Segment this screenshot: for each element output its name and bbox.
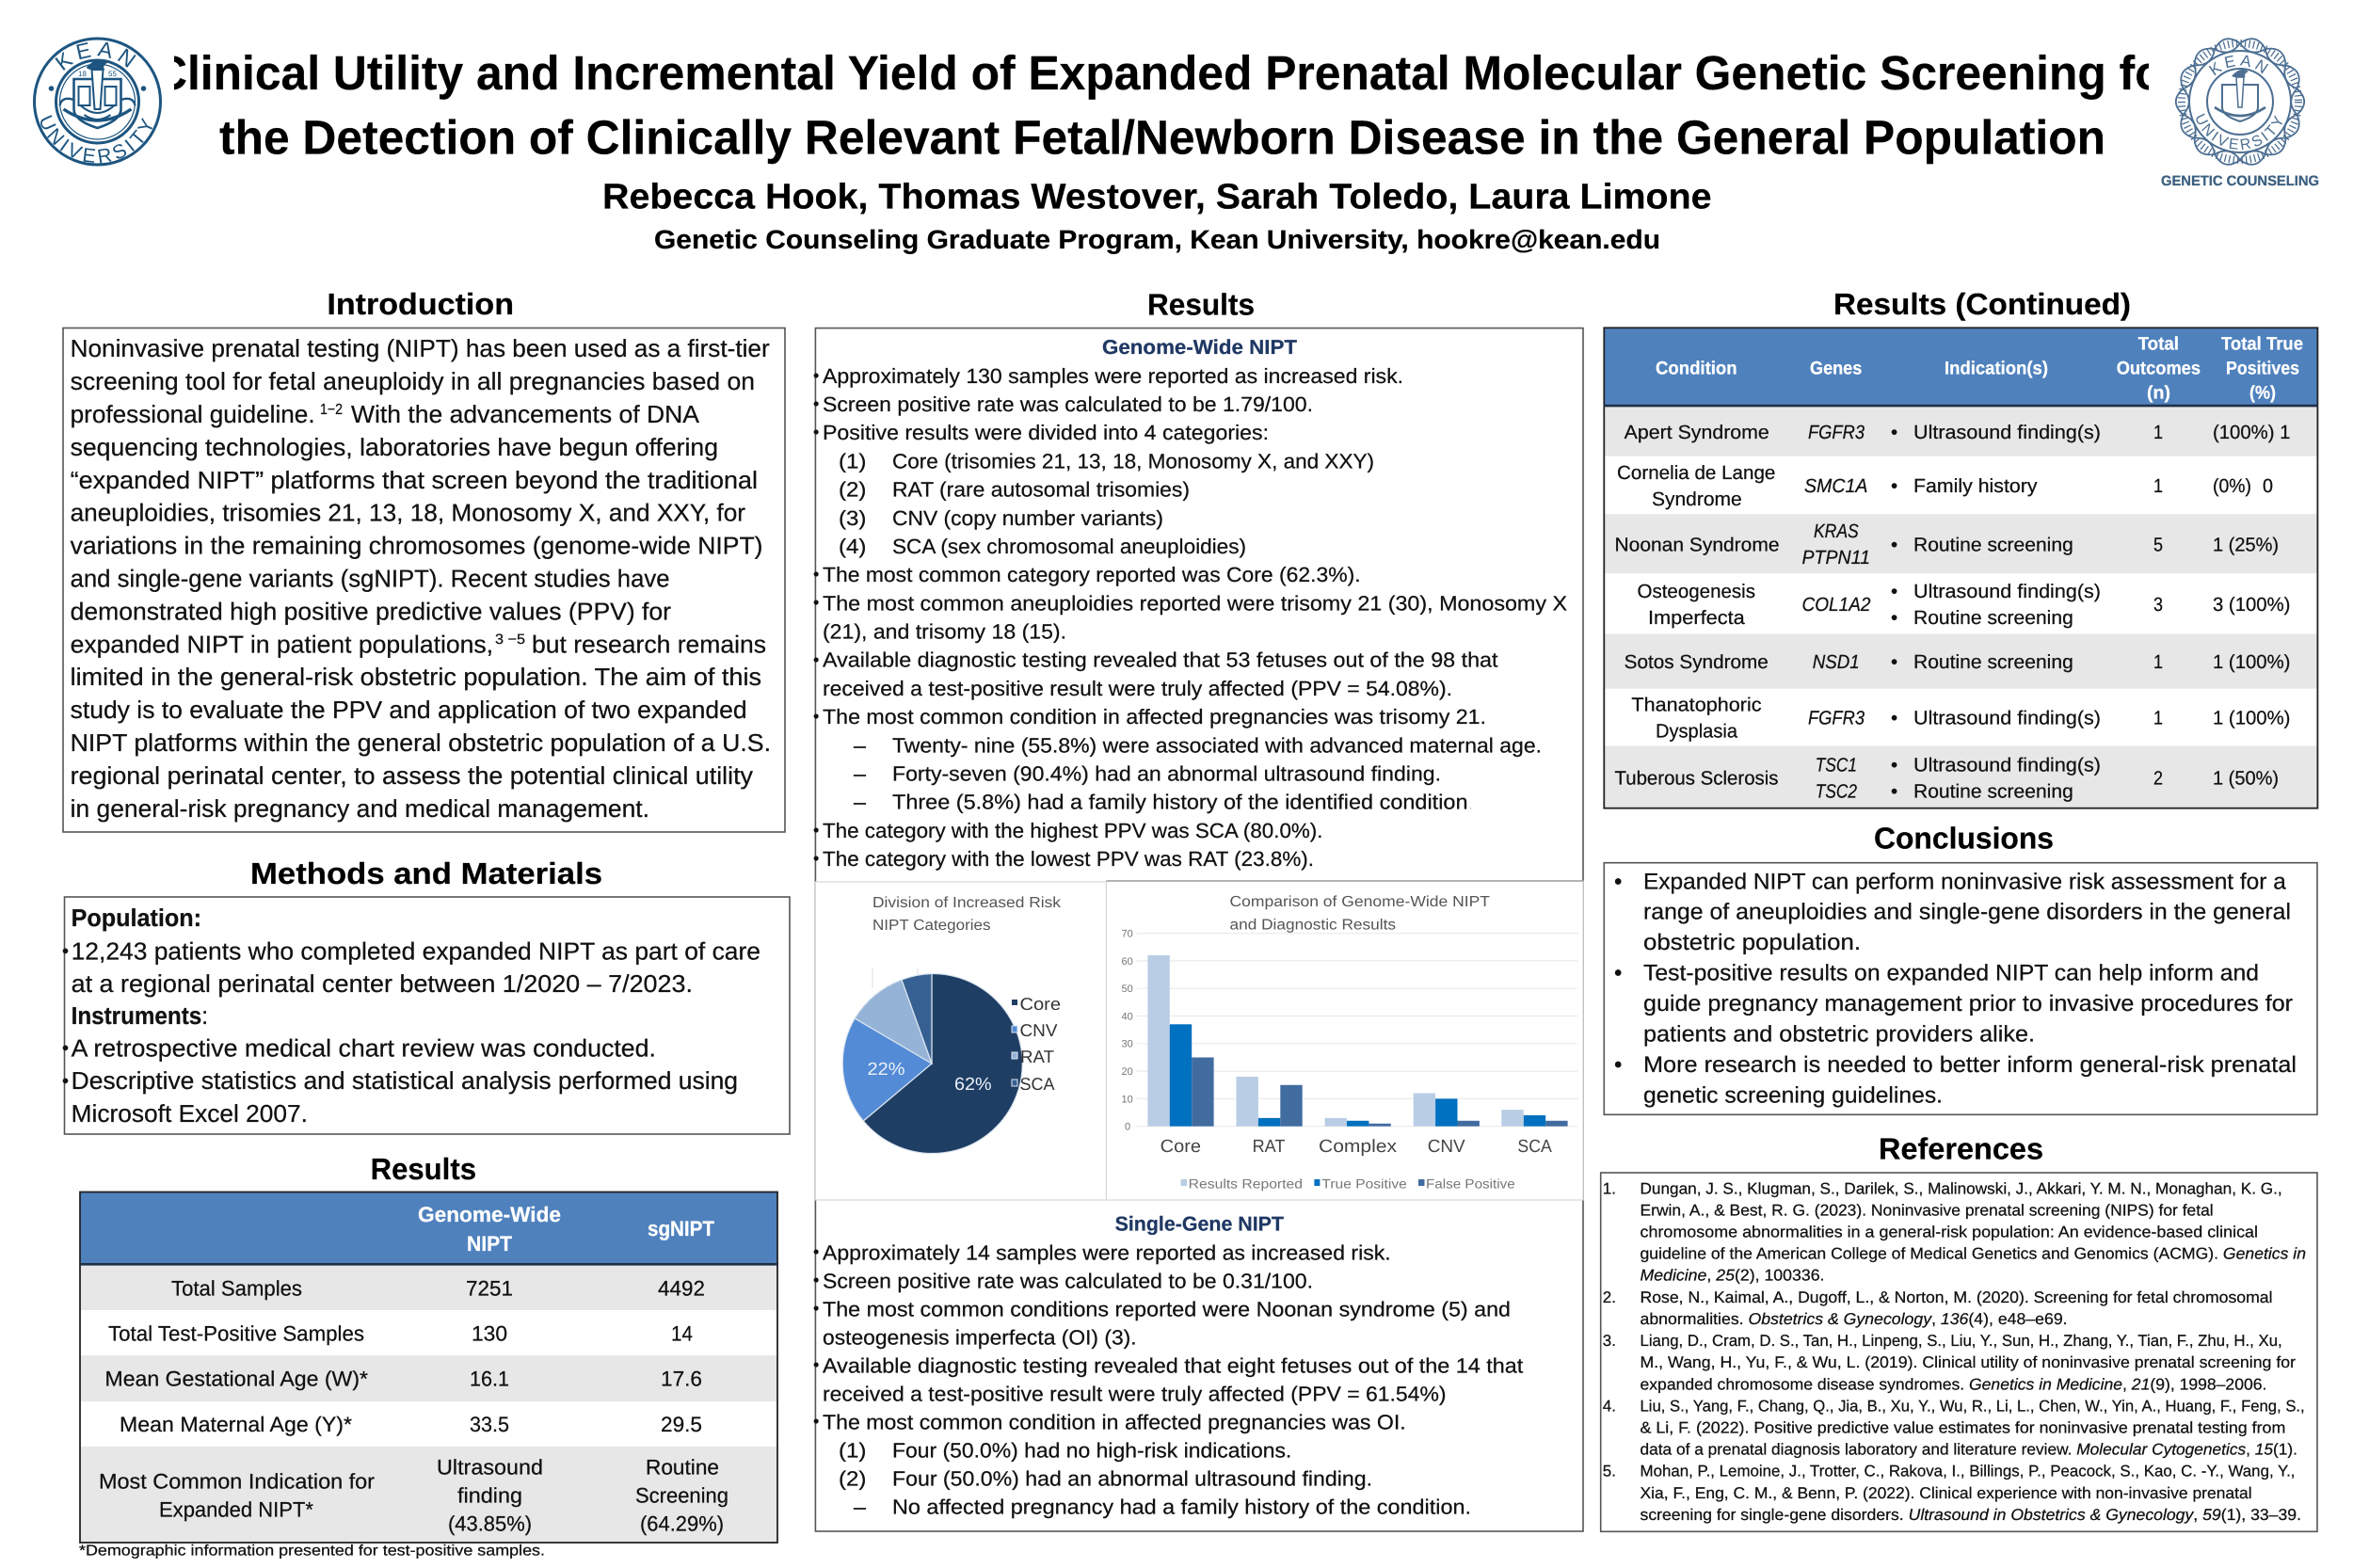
table: single-gene conditions: Sotos Syndrome bbox=[1625, 651, 1769, 673]
table: demographic results: Ultrasound bbox=[437, 1456, 543, 1480]
footnote: *Demographic information presented for test-positive samples. bbox=[79, 1544, 545, 1560]
subheading: Single-Gene NIPT: Single-Gene NIPT bbox=[1115, 1212, 1284, 1235]
chart: pie of increased risk categories: 62% bbox=[954, 1075, 992, 1095]
panel: introduction: demonstrated high positive predictive values (PPV) for bbox=[71, 597, 671, 625]
panel: references: 4. bbox=[1603, 1397, 1616, 1415]
panel: introduction: professional guideline. bbox=[71, 400, 315, 428]
chart: pie of increased risk categories: SCA bbox=[1020, 1074, 1055, 1094]
table: single-gene conditions: Condition bbox=[1656, 358, 1737, 378]
table: single-gene conditions: Positives bbox=[2226, 358, 2299, 378]
chart: pie of increased risk categories: 22% bbox=[868, 1060, 905, 1080]
text block: genome-wide findings: (21), and trisomy 18 (15). bbox=[823, 619, 1066, 644]
panel: references: Liang, D., Cram, D. S., Tan, H., Linpeng, S., Liu, Y., Sun, H., Zhang, Y., Tian, F., Zhu, H., Xu, bbox=[1640, 1332, 2282, 1350]
logo: Kean Genetic Counseling seal: GENETIC COUNSELING bbox=[2161, 173, 2319, 189]
panel: references: Medicine, 25(2), 100336. bbox=[1640, 1267, 1824, 1285]
panel: conclusions: genetic screening guidelines. bbox=[1643, 1083, 1943, 1109]
text block: genome-wide findings: • bbox=[813, 593, 819, 612]
table: single-gene conditions: 1 (25%) bbox=[2213, 534, 2279, 555]
text block: genome-wide findings: Core (trisomies 21, 13, 18, Monosomy X, and XXY) bbox=[892, 449, 1374, 472]
table: demographic results: 17.6 bbox=[661, 1368, 702, 1391]
chart: bar comparison of NIPT and diagnostic results: 70 bbox=[1122, 928, 1133, 939]
table: single-gene conditions: (100%) 1 bbox=[2213, 422, 2290, 443]
panel: conclusions: • bbox=[1614, 1052, 1622, 1078]
heading: Results (Continued): Results (Continued) bbox=[1833, 287, 2131, 321]
table: single-gene conditions: • bbox=[1891, 534, 1897, 555]
chart: bar comparison of NIPT and diagnostic results: CNV bbox=[1428, 1137, 1465, 1157]
chart: bar comparison of NIPT and diagnostic results: Comparison of Genome-Wide NIPT bbox=[1229, 894, 1490, 910]
table: single-gene conditions: Syndrome bbox=[1652, 488, 1742, 510]
table: single-gene conditions: Noonan Syndrome bbox=[1615, 534, 1779, 555]
text block: single-gene findings: Screen positive rate was calculated to be 0.31/100. bbox=[823, 1269, 1313, 1292]
chart: pie of increased risk categories: Division of Increased Risk bbox=[872, 895, 1062, 911]
text block: genome-wide findings: Twenty- nine (55.8%) were associated with advanced maternal age. bbox=[892, 733, 1542, 757]
text block: genome-wide findings: received a test-positive result were truly affected (PPV = 54.08%). bbox=[823, 677, 1452, 700]
table: single-gene conditions: SMC1A bbox=[1804, 475, 1867, 497]
text block: genome-wide findings: SCA (sex chromosomal aneuploidies) bbox=[892, 535, 1246, 558]
table: demographic results: 130 bbox=[472, 1322, 507, 1346]
table: single-gene conditions: 0 bbox=[2263, 475, 2273, 497]
logo: Kean University seal: KEAN bbox=[55, 41, 136, 71]
table: demographic results: 29.5 bbox=[661, 1413, 702, 1436]
text block: genome-wide findings: • bbox=[813, 707, 819, 726]
chart: pie of increased risk categories: NIPT Categories bbox=[872, 918, 990, 934]
table: demographic results: Total Test-Positive Samples bbox=[108, 1322, 364, 1346]
table: single-gene conditions: Outcomes bbox=[2117, 358, 2201, 378]
chart: bar comparison of NIPT and diagnostic results: 40 bbox=[1122, 1011, 1133, 1022]
title bbox=[153, 46, 2182, 164]
table: single-gene conditions: Ultrasound finding(s) bbox=[1913, 707, 2101, 728]
panel: references: Xia, F., Eng, C. M., & Benn, P. (2022). Clinical experience with non-invasive prenatal bbox=[1640, 1484, 2252, 1502]
panel: conclusions: obstetric population. bbox=[1643, 930, 1861, 955]
table: single-gene conditions: FGFR3 bbox=[1808, 422, 1865, 443]
heading: Results (left column): Results bbox=[371, 1152, 476, 1186]
panel: references: 1. bbox=[1603, 1179, 1616, 1197]
text block: genome-wide findings: – bbox=[854, 733, 867, 757]
text block: genome-wide findings: CNV (copy number variants) bbox=[892, 506, 1163, 530]
table: demographic results: Most Common Indication for bbox=[99, 1470, 376, 1494]
table: single-gene conditions: TSC2 bbox=[1816, 780, 1858, 802]
table: demographic results: 33.5 bbox=[470, 1413, 509, 1436]
panel: conclusions: • bbox=[1614, 869, 1622, 894]
panel: references: 2. bbox=[1603, 1288, 1616, 1306]
panel: methods and materials: at a regional perinatal center between 1/2020 – 7/2023. bbox=[72, 969, 693, 998]
table: single-gene conditions: FGFR3 bbox=[1808, 707, 1865, 728]
table: demographic results: NIPT bbox=[467, 1232, 512, 1256]
table: single-gene conditions: • bbox=[1891, 607, 1897, 629]
title: the Detection of Clinically Relevant Fetal/Newborn Disease in the General Population bbox=[219, 110, 2105, 164]
panel: introduction: and single-gene variants (sgNIPT). Recent studies have bbox=[71, 565, 670, 593]
panel: methods and materials: Population: bbox=[72, 904, 201, 932]
panel: references: Rose, N., Kaimal, A., Dugoff, L., & Norton, M. (2020). Screening for fetal chromosomal bbox=[1640, 1288, 2272, 1306]
text block: genome-wide findings: (4) bbox=[839, 535, 866, 558]
panel: introduction: in general-risk pregnancy and medical management. bbox=[71, 794, 649, 823]
table: single-gene conditions: (0%) bbox=[2213, 475, 2251, 497]
logo: Kean Genetic Counseling seal: KEAN bbox=[2208, 55, 2268, 75]
text block: genome-wide findings: Positive results were divided into 4 categories: bbox=[823, 421, 1269, 444]
text block: single-gene findings: – bbox=[854, 1496, 867, 1519]
table: single-gene conditions: • bbox=[1891, 707, 1897, 728]
table: demographic results: 14 bbox=[671, 1322, 693, 1346]
text block: genome-wide findings: Screen positive rate was calculated to be 1.79/100. bbox=[823, 392, 1313, 416]
table: single-gene conditions: Ultrasound finding(s) bbox=[1913, 755, 2101, 776]
text block: single-gene findings: (2) bbox=[839, 1467, 866, 1491]
logo: Kean University seal: UNIVERSITY bbox=[40, 115, 152, 164]
panel: references: Erwin, A., & Best, R. G. (2023). Noninvasive prenatal screening (NIPS) for fetal bbox=[1640, 1201, 2214, 1219]
panel: conclusions: Test-positive results on expanded NIPT can help inform and bbox=[1643, 961, 2259, 986]
text block: genome-wide findings: • bbox=[813, 821, 819, 840]
text block: single-gene findings: The most common condition in affected pregnancies was OI. bbox=[823, 1411, 1406, 1434]
chart: bar comparison of NIPT and diagnostic results: False Positive bbox=[1426, 1176, 1515, 1192]
table: single-gene conditions: Apert Syndrome bbox=[1625, 422, 1769, 443]
table: single-gene conditions: NSD1 bbox=[1813, 651, 1860, 673]
chart: bar comparison of NIPT and diagnostic results: and Diagnostic Results bbox=[1229, 918, 1396, 934]
table: single-gene conditions: Routine screening bbox=[1913, 780, 2073, 802]
table: single-gene conditions: Tuberous Sclerosis bbox=[1615, 768, 1779, 789]
text block: genome-wide findings: The category with the lowest PPV was RAT (23.8%). bbox=[823, 847, 1314, 871]
panel: references bbox=[1601, 1173, 2317, 1531]
authors: Rebecca Hook, Thomas Westover, Sarah Toledo, Laura Limone bbox=[602, 178, 1712, 217]
heading: Results (middle column): Results bbox=[1147, 287, 1255, 321]
panel: introduction: screening tool for fetal aneuploidy in all pregnancies based on bbox=[71, 367, 755, 395]
table: single-gene conditions: • bbox=[1891, 755, 1897, 776]
table: single-gene conditions: 1 bbox=[2153, 651, 2163, 673]
text block: genome-wide findings: – bbox=[854, 791, 867, 814]
panel: introduction: “expanded NIPT” platforms that screen beyond the traditional bbox=[71, 466, 758, 494]
text block: genome-wide findings: The most common condition in affected pregnancies was trisomy 21. bbox=[823, 705, 1486, 728]
chart: bar comparison of NIPT and diagnostic results: 50 bbox=[1122, 984, 1133, 995]
table: single-gene conditions: Cornelia de Lange bbox=[1617, 462, 1775, 484]
panel: conclusions: guide pregnancy management prior to invasive procedures for bbox=[1643, 991, 2293, 1016]
text block: genome-wide findings: . bbox=[1469, 801, 1472, 812]
table: demographic results: sgNIPT bbox=[648, 1217, 714, 1240]
text block: genome-wide findings: The most common category reported was Core (62.3%). bbox=[823, 563, 1361, 586]
table: single-gene conditions: Ultrasound finding(s) bbox=[1913, 581, 2101, 602]
table: single-gene conditions bbox=[1604, 328, 2318, 808]
panel: references: data of a prenatal diagnosis laboratory and literature review. Molecular Cytogenetics, 15(1). bbox=[1640, 1441, 2297, 1459]
table: demographic results: 4492 bbox=[658, 1276, 705, 1301]
text block: single-gene findings: No affected pregnancy had a family history of the condition. bbox=[892, 1496, 1471, 1519]
panel: references: Dungan, J. S., Klugman, S., Darilek, S., Malinowski, J., Akkari, Y. M. N., Monaghan, K. G., bbox=[1640, 1179, 2282, 1197]
panel: introduction: With the advancements of DNA bbox=[351, 400, 700, 428]
text block: genome-wide findings: – bbox=[854, 762, 867, 785]
chart: bar comparison of NIPT and diagnostic results: Core bbox=[1160, 1137, 1201, 1157]
table: single-gene conditions: 1 bbox=[2153, 707, 2163, 728]
table: single-gene conditions: COL1A2 bbox=[1801, 594, 1871, 616]
text block: genome-wide findings: • bbox=[813, 366, 819, 385]
text block: single-gene findings: • bbox=[813, 1271, 819, 1289]
table: single-gene conditions: • bbox=[1891, 651, 1897, 673]
panel: references: expanded chromosome disease syndromes. Genetics in Medicine , 21(9), 1998–2006. bbox=[1640, 1375, 2266, 1393]
chart: bar comparison of NIPT and diagnostic results: True Positive bbox=[1321, 1176, 1407, 1192]
panel: references: 5. bbox=[1603, 1463, 1616, 1480]
panel: methods and materials bbox=[62, 897, 790, 1134]
table: single-gene conditions: 1 bbox=[2153, 422, 2163, 443]
panel: references: Mohan, P., Lemoine, J., Trotter, C., Rakova, I., Billings, P., Peacock, S., Kao, C. -Y., Wang, Y., bbox=[1640, 1463, 2295, 1480]
table: single-gene conditions: (n) bbox=[2147, 382, 2170, 403]
panel: results middle column bbox=[813, 328, 1583, 1531]
chart: bar comparison of NIPT and diagnostic results: 60 bbox=[1122, 956, 1133, 968]
table: single-gene conditions: 1 (100%) bbox=[2213, 707, 2290, 728]
table: single-gene conditions: 3 bbox=[2153, 594, 2163, 616]
panel: introduction: expanded NIPT in patient populations, bbox=[71, 630, 493, 658]
chart: bar comparison of NIPT and diagnostic results: Complex bbox=[1319, 1137, 1398, 1157]
logo: Kean University seal: 18 bbox=[78, 70, 87, 78]
table: single-gene conditions: • bbox=[1891, 475, 1897, 497]
panel: introduction bbox=[63, 328, 785, 832]
text block: single-gene findings: (1) bbox=[839, 1439, 866, 1463]
table: single-gene conditions: Ultrasound finding(s) bbox=[1913, 422, 2101, 443]
text block: single-gene findings: • bbox=[813, 1412, 819, 1431]
panel: references: & Li, F. (2022). Positive predictive value estimates for noninvasive prenatal testing from bbox=[1640, 1419, 2285, 1436]
text block: genome-wide findings: (3) bbox=[839, 506, 866, 530]
logo: Kean Genetic Counseling seal bbox=[2161, 38, 2319, 189]
chart: pie of increased risk categories: Core bbox=[1020, 994, 1061, 1014]
heading: References: References bbox=[1879, 1132, 2043, 1166]
table: single-gene conditions: 2 bbox=[2153, 768, 2163, 789]
subheading: Genome-Wide NIPT: Genome-Wide NIPT bbox=[1102, 336, 1297, 359]
text block: genome-wide findings: (1) bbox=[839, 449, 866, 472]
panel: introduction: aneuploidies, trisomies 21, 13, 18, Monosomy X, and XXY, for bbox=[71, 499, 745, 527]
panel: methods and materials: Instruments: bbox=[72, 1001, 208, 1030]
table: single-gene conditions: PTPN11 bbox=[1801, 547, 1870, 568]
chart: pie of increased risk categories: RAT bbox=[1020, 1047, 1054, 1066]
text block: genome-wide findings: • bbox=[813, 423, 819, 441]
table: demographic results: Mean Gestational Age (W)* bbox=[105, 1368, 368, 1391]
chart: bar comparison of NIPT and diagnostic results bbox=[1107, 881, 1583, 1200]
table: single-gene conditions: 5 bbox=[2153, 534, 2163, 555]
table: demographic results: Genome-Wide bbox=[418, 1203, 561, 1226]
panel: references: chromosome abnormalities in a general-risk population: An evidence-based clinical bbox=[1640, 1224, 2258, 1240]
table: demographic results: finding bbox=[457, 1484, 522, 1508]
chart: pie of increased risk categories bbox=[815, 882, 1106, 1200]
chart: bar comparison of NIPT and diagnostic results: RAT bbox=[1253, 1137, 1286, 1157]
chart: pie of increased risk categories: CNV bbox=[1020, 1020, 1058, 1040]
table: single-gene conditions: Genes bbox=[1810, 358, 1862, 378]
text block: genome-wide findings bbox=[813, 364, 1567, 871]
table: single-gene conditions: 1 bbox=[2153, 475, 2163, 497]
panel: introduction: 1−2 bbox=[320, 402, 343, 418]
table: single-gene conditions: • bbox=[1891, 581, 1897, 602]
text block: single-gene findings: osteogenesis imperfecta (OI) (3). bbox=[823, 1325, 1137, 1349]
logo: Kean University seal: 55 bbox=[108, 70, 117, 78]
chart: bar comparison of NIPT and diagnostic results: 20 bbox=[1122, 1066, 1133, 1078]
table: single-gene conditions: KRAS bbox=[1814, 520, 1859, 542]
panel: methods and materials: A retrospective medical chart review was conducted. bbox=[72, 1034, 656, 1063]
panel: introduction: Noninvasive prenatal testing (NIPT) has been used as a first-tier bbox=[71, 334, 770, 362]
panel: references: 3. bbox=[1603, 1332, 1616, 1350]
text block: single-gene findings: Four (50.0%) had no high-risk indications. bbox=[892, 1439, 1291, 1463]
panel: conclusions: range of aneuploidies and single-gene disorders in the general bbox=[1643, 900, 2291, 925]
table: single-gene conditions: Family history bbox=[1913, 475, 2038, 497]
table: demographic results bbox=[79, 1192, 778, 1543]
panel: references: M., Wang, H., Yu, F., & Wu, L. (2019). Clinical utility of noninvasive prenatal screening for bbox=[1640, 1353, 2296, 1371]
table: single-gene conditions: 3 (100%) bbox=[2213, 594, 2290, 616]
table: demographic results: 16.1 bbox=[470, 1368, 509, 1391]
text block: genome-wide findings: (2) bbox=[839, 478, 866, 502]
text block: genome-wide findings: • bbox=[813, 650, 819, 669]
panel: conclusions bbox=[1604, 863, 2317, 1114]
panel: introduction: but research remains bbox=[532, 630, 766, 658]
table: demographic results: (43.85%) bbox=[448, 1512, 532, 1536]
table: single-gene conditions: • bbox=[1891, 780, 1897, 802]
table: single-gene conditions: Routine screening bbox=[1913, 651, 2073, 673]
text block: genome-wide findings: • bbox=[813, 394, 819, 413]
text block: genome-wide findings: Approximately 130 samples were reported as increased risk. bbox=[823, 364, 1403, 388]
panel: introduction: regional perinatal center, to assess the potential clinical utility bbox=[71, 761, 753, 790]
panel: introduction: 3 −5 bbox=[495, 632, 525, 648]
table: single-gene conditions: (%) bbox=[2249, 382, 2276, 403]
panel: methods and materials: Microsoft Excel 2007. bbox=[72, 1099, 308, 1128]
table: single-gene conditions: Routine screening bbox=[1913, 607, 2073, 629]
logo: Kean Genetic Counseling seal: UNIVERSITY bbox=[2196, 113, 2282, 150]
table: single-gene conditions: Imperfecta bbox=[1648, 607, 1745, 629]
panel: references: abnormalities. Obstetrics & Gynecology , 136(4), e48–e69. bbox=[1640, 1310, 2068, 1328]
panel: references: Liu, S., Yang, F., Chang, Q., Jia, B., Xu, Y., Wu, R., Li, L., Chen, W., Yin, A., Huang, F., Feng, S., bbox=[1640, 1397, 2305, 1415]
text block: genome-wide findings: Available diagnostic testing revealed that 53 fetuses out of the 98 that bbox=[823, 648, 1498, 672]
text block: single-gene findings: • bbox=[813, 1299, 819, 1318]
title: Clinical Utility and Incremental Yield of Expanded Prenatal Molecular Genetic Screening for bbox=[153, 46, 2182, 100]
panel: methods and materials: • bbox=[62, 1038, 69, 1059]
text block: single-gene findings: • bbox=[813, 1355, 819, 1374]
table: single-gene conditions: Thanatophoric bbox=[1631, 695, 1762, 716]
text block: genome-wide findings: • bbox=[813, 565, 819, 584]
text block: single-gene findings: • bbox=[813, 1242, 819, 1261]
heading: Conclusions: Conclusions bbox=[1874, 822, 2054, 856]
text block: single-gene findings: Available diagnostic testing revealed that eight fetuses out of the 14 that bbox=[823, 1354, 1523, 1378]
table: demographic results: Screening bbox=[635, 1484, 728, 1508]
text block: genome-wide findings: RAT (rare autosomal trisomies) bbox=[892, 478, 1190, 502]
panel: introduction: study is to evaluate the PPV and application of two expanded bbox=[71, 696, 747, 724]
table: single-gene conditions: 1 (50%) bbox=[2213, 768, 2279, 789]
chart: bar comparison of NIPT and diagnostic results: 30 bbox=[1122, 1039, 1133, 1050]
table: single-gene conditions: TSC1 bbox=[1816, 755, 1857, 776]
table: demographic results: (64.29%) bbox=[640, 1512, 724, 1536]
logo: Kean University seal bbox=[33, 38, 162, 166]
text block: single-gene findings: received a test-positive result were truly affected (PPV = 61.54%) bbox=[823, 1383, 1446, 1406]
chart: bar comparison of NIPT and diagnostic results: Results Reported bbox=[1189, 1176, 1303, 1192]
panel: introduction: NIPT platforms within the general obstetric population of a U.S. bbox=[71, 728, 771, 757]
panel: introduction: variations in the remaining chromosomes (genome-wide NIPT) bbox=[71, 532, 762, 560]
panel: conclusions: Expanded NIPT can perform noninvasive risk assessment for a bbox=[1643, 869, 2286, 894]
table: demographic results: 7251 bbox=[466, 1276, 513, 1301]
table: single-gene conditions: Indication(s) bbox=[1945, 358, 2048, 378]
chart: bar comparison of NIPT and diagnostic results: SCA bbox=[1517, 1137, 1552, 1157]
table: single-gene conditions: Dysplasia bbox=[1656, 720, 1738, 742]
affiliation: Genetic Counseling Graduate Program, Kean University, hookre@kean.edu bbox=[654, 225, 1660, 254]
text block: genome-wide findings: • bbox=[813, 849, 819, 868]
panel: conclusions: More research is needed to better inform general-risk prenatal bbox=[1643, 1052, 2297, 1078]
text block: single-gene findings: The most common conditions reported were Noonan syndrome (5) and bbox=[823, 1297, 1511, 1320]
panel: methods and materials: Descriptive statistics and statistical analysis performed using bbox=[72, 1066, 738, 1095]
table: single-gene conditions: Total bbox=[2138, 333, 2179, 354]
table: single-gene conditions: Total True bbox=[2221, 333, 2303, 354]
text block: genome-wide findings: Forty-seven (90.4%) had an abnormal ultrasound finding. bbox=[892, 762, 1441, 785]
panel: conclusions: patients and obstetric providers alike. bbox=[1643, 1022, 2035, 1048]
heading: Introduction: Introduction bbox=[327, 287, 514, 321]
panel: methods and materials: • bbox=[62, 1071, 69, 1092]
table: demographic results: Total Samples bbox=[171, 1276, 302, 1301]
chart: bar comparison of NIPT and diagnostic results: 0 bbox=[1125, 1122, 1130, 1133]
table: demographic results: Expanded NIPT* bbox=[159, 1498, 313, 1522]
table: single-gene conditions: • bbox=[1891, 422, 1897, 443]
chart: bar comparison of NIPT and diagnostic results: 10 bbox=[1122, 1094, 1133, 1105]
table: demographic results: Routine bbox=[646, 1456, 719, 1480]
text block: genome-wide findings: The most common aneuploidies reported were trisomy 21 (30), Monosomy X bbox=[823, 591, 1567, 615]
panel: introduction: sequencing technologies, laboratories have begun offering bbox=[71, 433, 718, 461]
text block: single-gene findings bbox=[813, 1240, 1523, 1519]
panel: references: screening for single-gene disorders. Ultrasound in Obstetrics & Gynecology , 59(1), 33–39. bbox=[1640, 1506, 2301, 1524]
text block: single-gene findings: Approximately 14 samples were reported as increased risk. bbox=[823, 1240, 1391, 1264]
panel: methods and materials: • bbox=[62, 941, 69, 962]
table: single-gene conditions: Routine screening bbox=[1913, 534, 2073, 555]
text block: single-gene findings: Four (50.0%) had an abnormal ultrasound finding. bbox=[892, 1467, 1372, 1491]
heading: Methods and Materials: Methods and Materials bbox=[250, 856, 602, 890]
panel: references: guideline of the American College of Medical Genetics and Genomics (ACMG). Genetics in bbox=[1640, 1245, 2306, 1263]
panel: introduction: limited in the general-risk obstetric population. The aim of this bbox=[71, 663, 761, 691]
panel: conclusions: • bbox=[1614, 961, 1622, 986]
text block: genome-wide findings: The category with the highest PPV was SCA (80.0%). bbox=[823, 819, 1323, 842]
text block: genome-wide findings: Three (5.8%) had a family history of the identified condition bbox=[892, 791, 1468, 814]
panel: methods and materials: 12,243 patients who completed expanded NIPT as part of care bbox=[72, 936, 760, 965]
table: single-gene conditions: 1 (100%) bbox=[2213, 651, 2290, 673]
table: demographic results: Mean Maternal Age (Y)* bbox=[120, 1413, 352, 1436]
table: single-gene conditions: Osteogenesis bbox=[1638, 581, 1755, 602]
